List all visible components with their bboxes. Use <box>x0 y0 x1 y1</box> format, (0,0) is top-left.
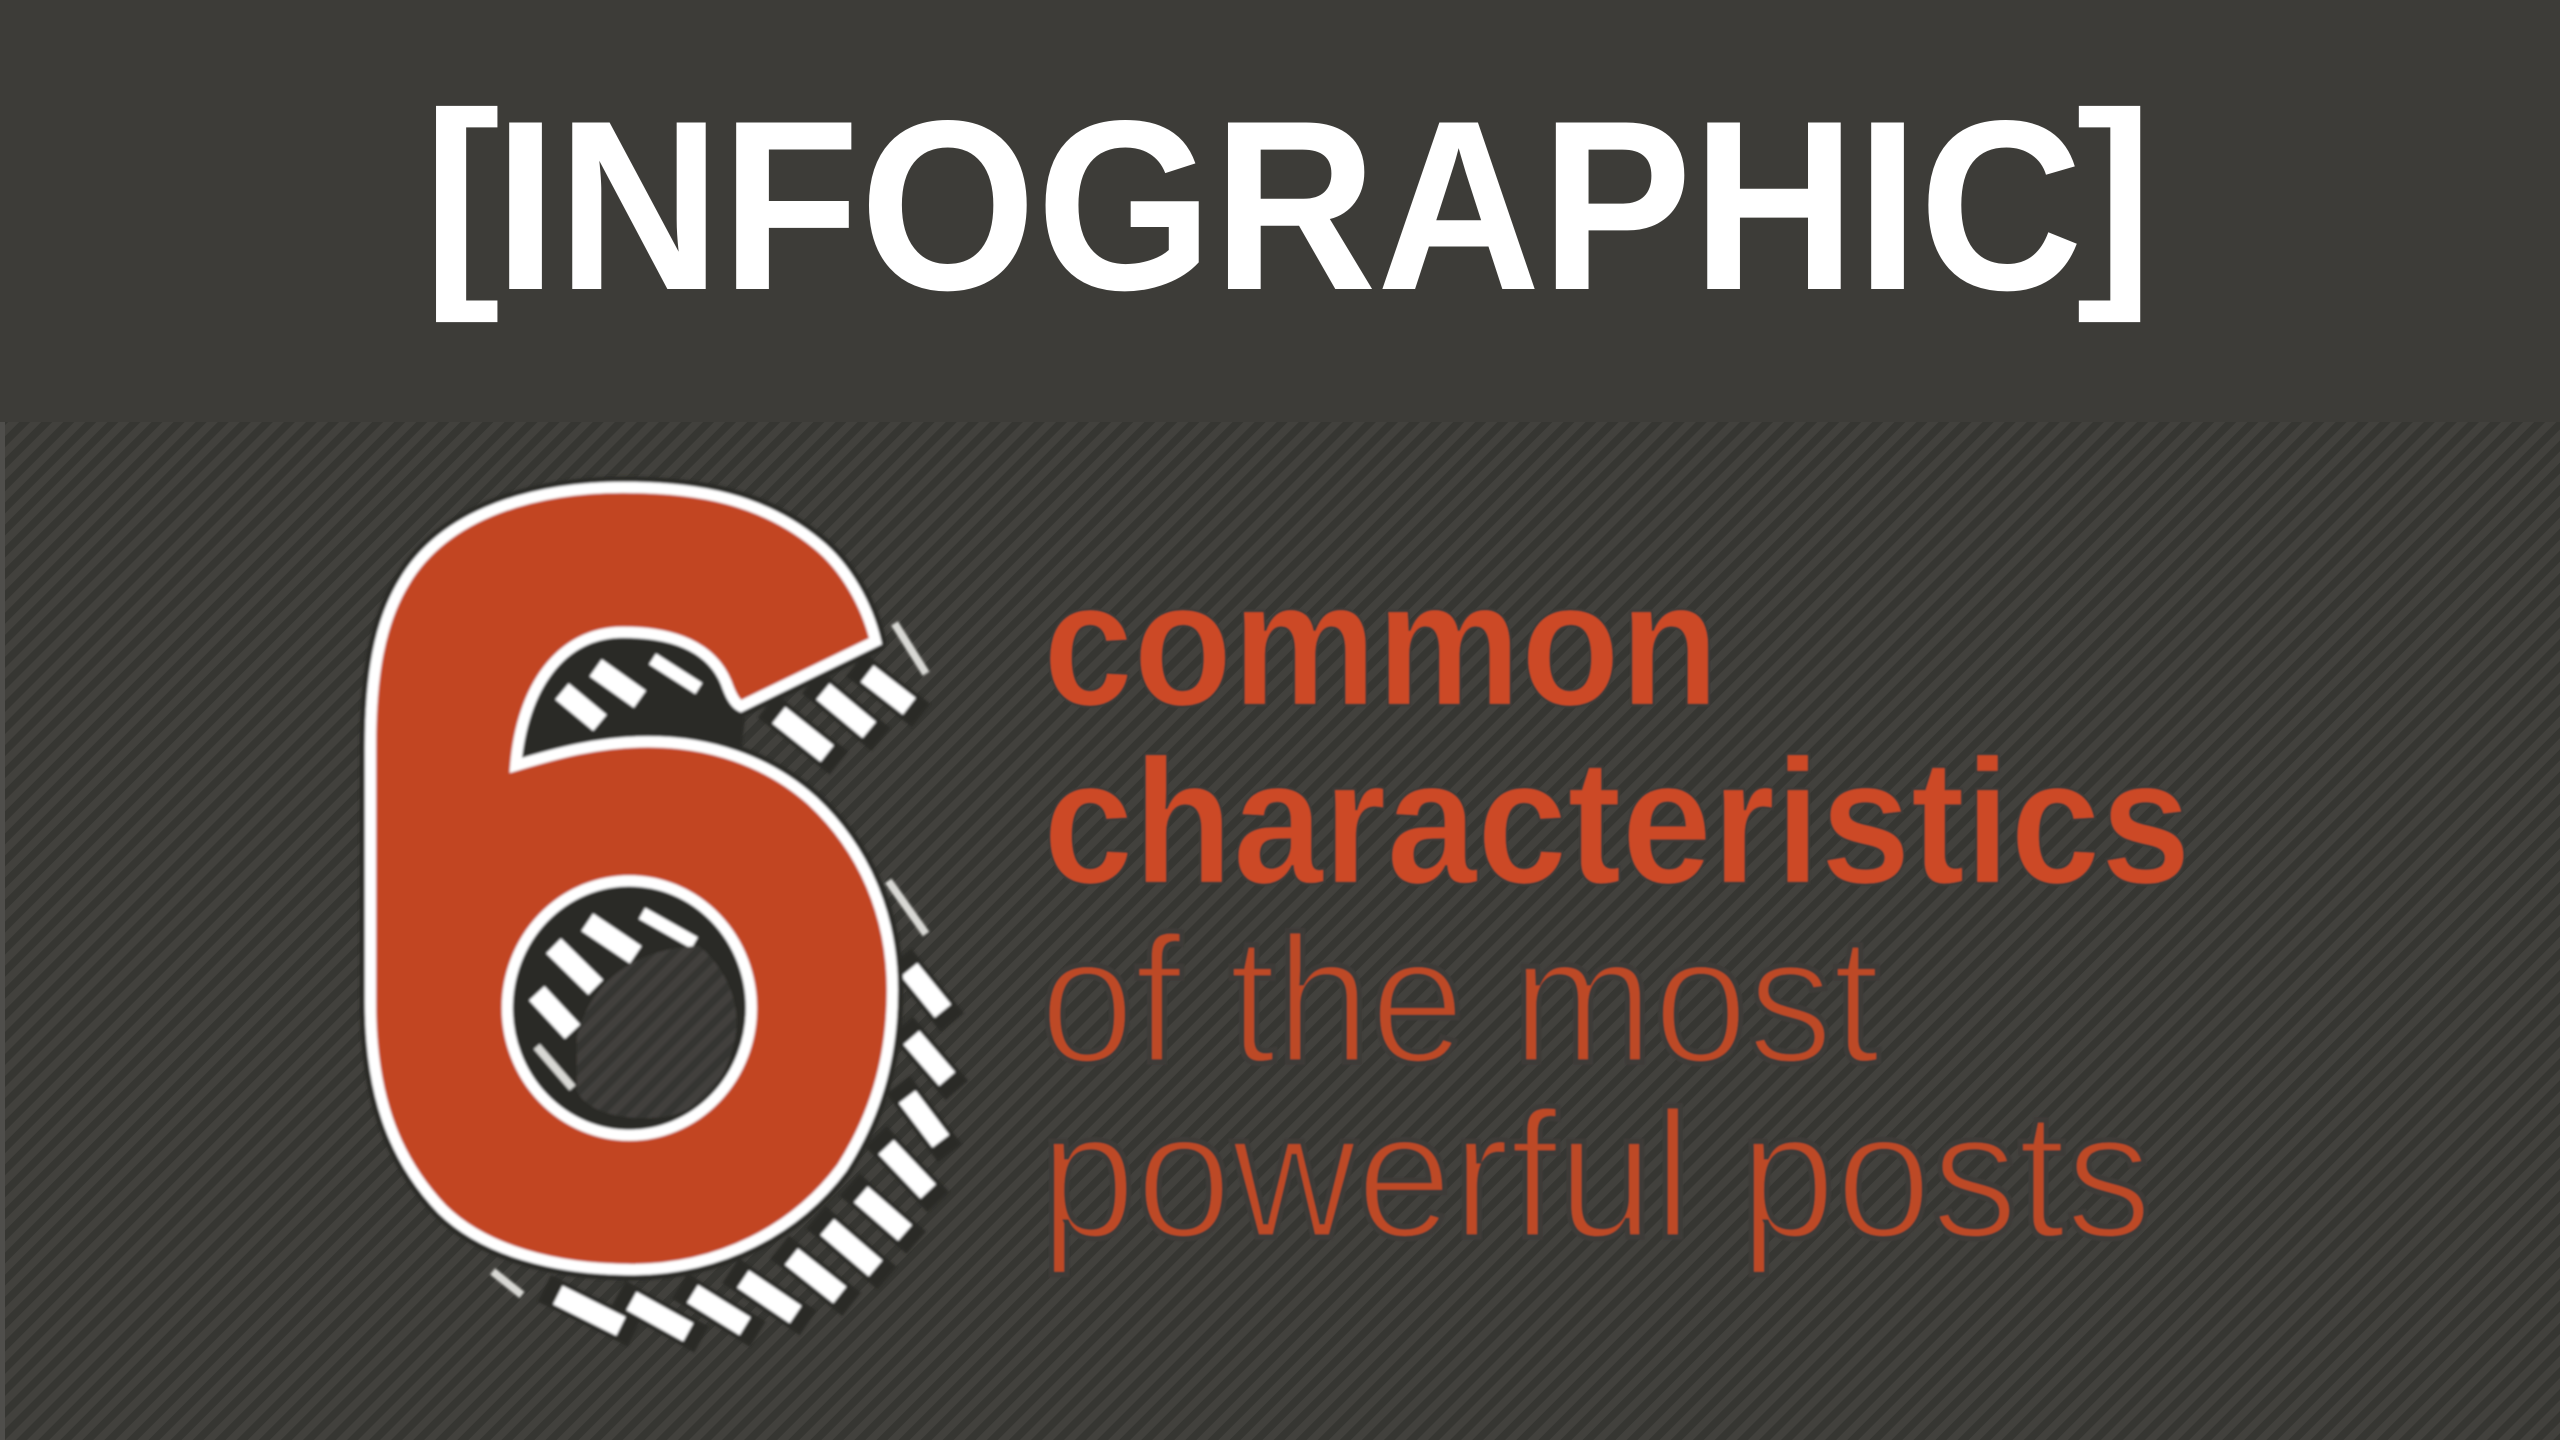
line: characteristics: characteristics <box>1043 722 2191 921</box>
upper counter stripes <box>562 659 699 723</box>
thin hatch stripes <box>493 623 926 1295</box>
upper counter shadow <box>516 632 745 765</box>
line: powerful posts: powerful posts <box>1040 1074 2152 1276</box>
outer hatch stripes <box>558 674 947 1332</box>
title: ] <box>2076 65 2153 324</box>
stripe halos <box>558 674 947 1332</box>
striped background panel <box>0 422 2560 1440</box>
header band <box>0 0 2560 422</box>
title: INFOGRAPHIC <box>494 71 2083 341</box>
heading: bold lines <box>1043 544 2191 921</box>
icon: large striped number 6 <box>371 487 947 1332</box>
line: common: common <box>1043 544 1719 743</box>
number shape <box>371 487 892 1270</box>
hole outline <box>507 881 751 1135</box>
hole stripes <box>537 913 737 1118</box>
heading: light lines <box>1040 899 2152 1276</box>
round hole <box>507 881 751 1135</box>
title: [ <box>423 65 500 324</box>
line: of the most: of the most <box>1040 899 1880 1101</box>
